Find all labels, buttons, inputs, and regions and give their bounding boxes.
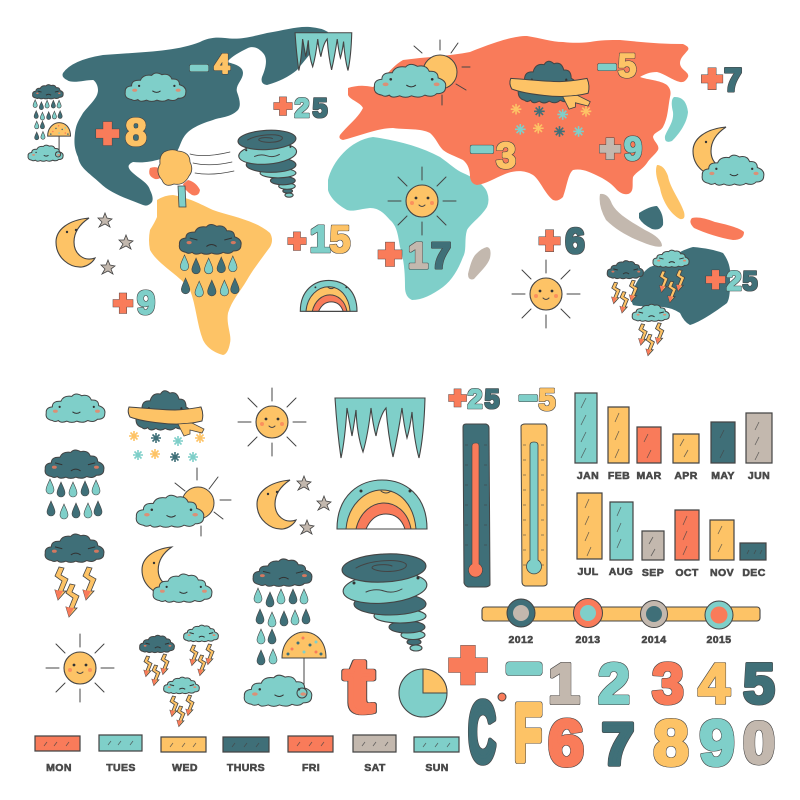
- label: +17: 7: [431, 235, 451, 276]
- weather: rain and umbrella upper left: [28, 85, 71, 161]
- day: THURS: [223, 737, 269, 774]
- day: WED: WED: [172, 762, 198, 774]
- weather: storm clouds on Australia: [607, 250, 689, 356]
- symbol: minus: −: [507, 636, 541, 701]
- days of week: [35, 735, 459, 774]
- label: +9 on Asia: [600, 130, 642, 168]
- thermometer: warm: 5: [484, 384, 500, 414]
- map: Central America: [149, 167, 200, 195]
- label: +25 north atlantic: 5: [312, 93, 328, 123]
- timeline: years: [482, 598, 760, 646]
- digit: 1: 1: [548, 652, 580, 716]
- label: +6: [540, 222, 585, 261]
- day: WED: [161, 737, 206, 774]
- icon: rain and umbrella: [244, 559, 326, 706]
- bar: JUL: JUL: [577, 566, 599, 578]
- bar: OCT: OCT: [675, 567, 699, 579]
- label: -4: −: [190, 52, 208, 85]
- thermometer: cold: 5: [538, 382, 556, 417]
- digit: 0: 0: [743, 711, 775, 776]
- label: +8: 8: [125, 112, 147, 154]
- node: 2015: 2015: [707, 634, 731, 646]
- label: -4: [190, 49, 230, 85]
- weather: cloud over sun on map: [374, 40, 470, 105]
- icon: sun on Africa: [388, 167, 456, 235]
- map: Eurasia: [339, 36, 688, 201]
- label: +6: +: [540, 222, 559, 260]
- bar: OCT: [675, 510, 699, 579]
- label: +25 north atlantic: [275, 91, 328, 123]
- day: THURS: THURS: [227, 762, 265, 774]
- digit: 9: 9: [699, 707, 735, 779]
- digit: 8: 8: [653, 707, 689, 779]
- icon: rainbow: [337, 480, 427, 529]
- label: +25 on Australia: [706, 262, 758, 297]
- bar: NOV: NOV: [710, 567, 734, 579]
- bar: MAY: [711, 422, 735, 482]
- digit: 7: 7: [602, 712, 634, 777]
- letter: t: t: [344, 643, 374, 728]
- label: +25 on Australia: +: [706, 262, 725, 297]
- day: FRI: [288, 736, 333, 774]
- bar: JUN: [746, 413, 772, 482]
- map: islands orange: [690, 218, 744, 240]
- label: +8: [97, 112, 147, 154]
- bar: AUG: AUG: [609, 566, 633, 578]
- label: +15: 1: [309, 219, 331, 261]
- icon: cloud over sun: [136, 468, 231, 536]
- map: Australia: [631, 247, 730, 325]
- symbol: degree dot: [498, 693, 506, 701]
- map: islands dark: [639, 206, 663, 230]
- map: islands teal: [665, 97, 688, 142]
- icon: sun lower center map: [512, 260, 580, 328]
- node: 2013: 2013: [576, 634, 600, 646]
- label: +25 on Australia: 5: [742, 266, 758, 296]
- day: SAT: SAT: [364, 762, 386, 774]
- bar: APR: APR: [674, 470, 698, 482]
- map: islands yellow: [656, 165, 684, 219]
- digit: 5: 5: [743, 652, 775, 716]
- label: +9 south west: +: [114, 285, 132, 321]
- day: FRI: FRI: [302, 762, 320, 774]
- map: South America: [149, 195, 272, 355]
- weather: snow cloud with scarf on map: [510, 61, 591, 137]
- weather: rain cloud on South America: [179, 225, 241, 297]
- digit: 2: 2: [598, 652, 630, 716]
- label: +15: 5: [329, 219, 351, 261]
- label: +9 south west: 9: [137, 284, 155, 321]
- label: -3: −: [471, 129, 493, 171]
- bar: FEB: FEB: [608, 470, 630, 482]
- bar: APR: [673, 434, 699, 482]
- day: SUN: SUN: [425, 762, 449, 774]
- bar: SEP: [642, 531, 664, 579]
- label: -5 on Asia: [598, 47, 636, 84]
- label: +7: [702, 60, 742, 98]
- icon: rainbow on map: [300, 280, 357, 311]
- icon: scarf snow cloud: [128, 391, 205, 462]
- label: +6: 6: [565, 222, 585, 261]
- bar: AUG: [609, 502, 633, 578]
- label: +7: 7: [724, 62, 742, 98]
- day: TUES: TUES: [106, 762, 136, 774]
- label: +17: [379, 234, 451, 276]
- node: 2014: 2014: [642, 634, 666, 646]
- label: +9 on Asia: 9: [624, 130, 642, 167]
- map: Madagascar: [468, 247, 491, 279]
- thermometers: [449, 382, 556, 587]
- day: SUN: [414, 737, 459, 774]
- icon: moon and stars: [257, 476, 331, 534]
- label: +15: +: [289, 226, 305, 258]
- bar chart: monthly values: [575, 393, 772, 579]
- bar: JAN: [575, 393, 599, 482]
- thermometer: cold: −: [519, 382, 537, 415]
- icon: rain cloud: [45, 450, 104, 519]
- digit: 4: 4: [698, 652, 730, 716]
- symbol: F: F: [514, 688, 542, 777]
- thermometer: warm: 2: [467, 384, 483, 414]
- icon: icicles on map: [295, 33, 352, 71]
- icon: sun large: [238, 388, 306, 456]
- node: 2015: [705, 601, 733, 646]
- label: -3: 3: [496, 135, 516, 176]
- world map: [62, 27, 744, 355]
- node: 2014: [640, 600, 668, 646]
- label: +8: +: [97, 113, 118, 154]
- bar: MAR: MAR: [636, 470, 662, 482]
- icon: plain cloud: [46, 394, 105, 422]
- bar: JAN: JAN: [577, 470, 599, 482]
- day: SAT: [353, 735, 396, 774]
- bar: DEC: DEC: [742, 567, 766, 579]
- map: Africa: [328, 137, 488, 300]
- label: +15: [289, 219, 351, 261]
- thermometer: cold: [519, 382, 556, 586]
- bar: SEP: SEP: [642, 567, 664, 579]
- temperature labels on map: [97, 47, 758, 321]
- label: +25 north atlantic: 2: [294, 93, 310, 123]
- digit: 6: 6: [548, 707, 584, 779]
- node: 2013: [574, 598, 602, 646]
- label: -4: 4: [214, 49, 230, 79]
- icon: icicles: [335, 398, 425, 458]
- bar: MAY: MAY: [711, 470, 735, 482]
- icon: sun small: [46, 634, 114, 702]
- label: +17: 1: [408, 235, 428, 276]
- label: +25 on Australia: 2: [726, 266, 742, 296]
- thermometer: warm: +: [449, 382, 466, 413]
- label: +17: +: [379, 234, 401, 276]
- label: -5 on Asia: 5: [618, 47, 636, 84]
- day: MON: [35, 736, 80, 774]
- label: +9 on Asia: +: [600, 130, 620, 168]
- label: +25 north atlantic: +: [275, 91, 291, 123]
- bar: FEB: [608, 407, 630, 482]
- chart: pie: [399, 669, 447, 717]
- symbol: C: C: [468, 685, 496, 779]
- bar: MAR: [636, 427, 662, 482]
- label: -5 on Asia: −: [598, 51, 616, 84]
- icon: tornado on map: [238, 129, 297, 197]
- node: 2012: 2012: [509, 634, 533, 646]
- node: 2012: [507, 599, 535, 646]
- map: North America: [62, 27, 328, 206]
- icon: moon with cloud: [142, 547, 212, 602]
- digit: 3: 3: [652, 652, 684, 716]
- thermometer: warm: [449, 382, 500, 587]
- icon: storm clouds group: [140, 625, 218, 726]
- glyph set: numbers and symbols: [344, 631, 775, 779]
- symbol: plus: +: [450, 631, 486, 700]
- bar: DEC: [740, 543, 766, 579]
- map: islands grey: [600, 194, 662, 247]
- label: -3: [471, 129, 516, 176]
- icon: tornado: [341, 552, 428, 651]
- icon: tree in wind: [158, 150, 234, 207]
- bar: NOV: [710, 520, 734, 579]
- day: MON: MON: [46, 762, 72, 774]
- bar: JUL: [577, 493, 602, 578]
- weather: cloud on North America: [125, 73, 186, 101]
- icon: moon and stars on map: [56, 213, 133, 274]
- bar: JUN: JUN: [748, 470, 770, 482]
- label: +7: +: [702, 60, 722, 98]
- panel: weather icon set: [45, 388, 428, 726]
- label: +9 south west: [114, 284, 155, 321]
- icon: storm cloud: [45, 534, 104, 617]
- icon: moon and cloud on map right: [693, 127, 764, 185]
- day: TUES: [99, 735, 142, 774]
